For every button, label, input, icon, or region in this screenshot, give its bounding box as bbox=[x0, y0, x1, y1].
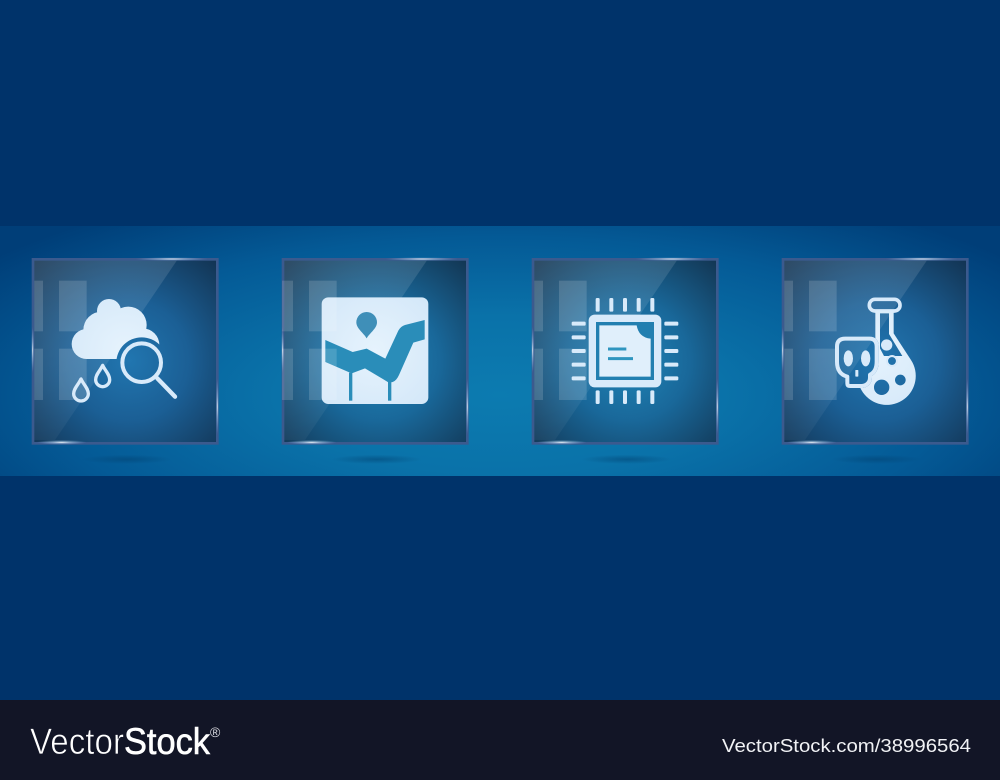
horizontal blue band bbox=[0, 226, 1000, 476]
logo wordmark: Vector bbox=[30, 721, 124, 762]
panel: cloud rain search bbox=[31, 257, 219, 464]
icon: flask and skull bbox=[837, 299, 916, 405]
panel: toxic flask with skull bbox=[781, 257, 969, 464]
icon: CPU chip bbox=[572, 298, 678, 404]
panel: processor chip bbox=[531, 257, 719, 464]
icon: map with pin bbox=[322, 297, 428, 404]
logo wordmark bbox=[30, 721, 221, 762]
panel: map location bbox=[281, 257, 469, 464]
logo wordmark: Stock bbox=[124, 721, 210, 762]
footer bar bbox=[0, 700, 1000, 780]
logo wordmark: ® bbox=[210, 724, 221, 740]
image id text: VectorStock.com/38996564 bbox=[722, 736, 971, 756]
icon: cloud with rain drops and magnifier bbox=[72, 299, 175, 401]
